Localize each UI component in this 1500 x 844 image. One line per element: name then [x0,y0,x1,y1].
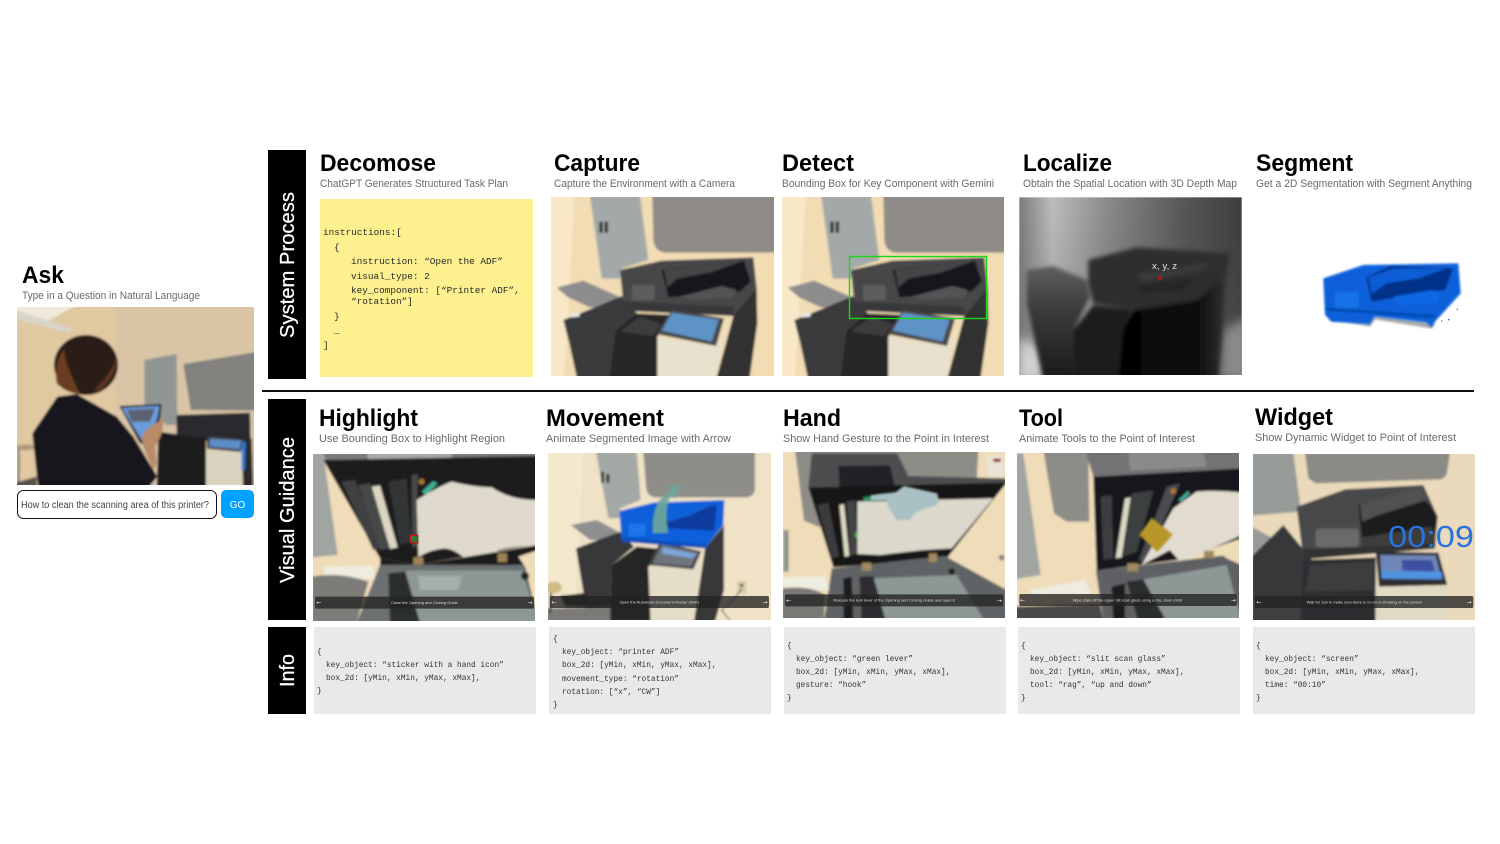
GO button: GO [230,500,245,511]
subtitle: decompose: ChatGPT Generates Structured Task Plan [320,178,508,190]
caption bar: → [1231,597,1236,604]
info card: highlight: key_object: “sticker with a hand icon” [326,662,504,670]
panel: detect [778,150,1011,380]
label bar: System Process [268,150,306,379]
panel: highlight [312,405,538,623]
timer widget: 00:09 [1388,519,1474,554]
caption bar: → [762,599,768,606]
caption bar: → [527,600,533,607]
subtitle: movement: Animate Segmented Image with Arrow [546,433,731,445]
red highlight box [410,535,418,543]
info card: hand: { [787,643,792,651]
caption bar: → [1466,599,1472,606]
heading: Localize: Localize [1023,150,1112,177]
yellow task plan note: … [334,326,340,337]
heading: Movement: Movement [546,405,664,432]
depth coordinates label: x, y, z [1152,261,1178,271]
caption bar: Close the Opening and Closing Guide [391,600,459,605]
caption bar [785,594,1003,606]
heading: Hand: Hand [783,405,841,432]
label bar: Info: Info [276,654,299,687]
yellow task plan note: instruction: “Open the ADF” [351,256,503,267]
panel: movement [546,405,773,622]
label bar: System Process: System Process [276,192,299,338]
info card: highlight: { [317,649,322,657]
panel: tool [1015,405,1242,622]
caption bar: Open the Automatic Document Feeder (ADF) [619,599,700,604]
info card: movement: box_2d: [yMin, xMin, yMax, xMax], [562,662,716,670]
photo: opened scanner with hand gesture [782,450,1008,622]
photo: opened scanner with rag tool [1015,450,1242,622]
info card: hand: gesture: “hook” [796,682,866,690]
label bar: Visual Guidance: Visual Guidance [276,437,299,583]
info card: widget: } [1256,695,1261,703]
caption bar: ← [786,597,791,604]
subtitle: segment: Get a 2D Segmentation with Segment Anything [1256,178,1472,190]
yellow task plan note: key_component: [“Printer ADF”, [351,285,520,296]
input box: How to clean the scanning area of this printer? [21,500,209,511]
hand gesture icon [871,486,939,520]
info card: widget: box_2d: [yMin, xMin, yMax, xMax], [1265,669,1419,677]
subtitle: ask: Type in a Question in Natural Language [22,290,200,302]
GO button [221,490,254,518]
yellow task plan note: “rotation”] [351,296,413,307]
subtitle: tool: Animate Tools to the Point of Interest [1019,433,1195,445]
info card: hand [784,627,1006,714]
heading: Capture: Capture [554,150,640,177]
info card: highlight: box_2d: [yMin, xMin, yMax, xMax], [326,675,480,683]
info card: hand: } [787,695,792,703]
caption bar [550,596,769,608]
panel: widget [1252,404,1478,623]
info card: movement: rotation: [“x”, “CW”] [562,689,660,697]
yellow task plan note: { [334,242,340,253]
caption bar [1019,594,1237,606]
curved teal arrow [652,485,682,533]
info card: tool: tool: “rag”, “up and down” [1030,682,1152,690]
caption bar: Release the lock lever of the Opening and Closing Guide and open it [833,598,955,603]
subtitle: hand: Show Hand Gesture to the Point in Interest [783,433,989,445]
label bar: Visual Guidance [268,399,306,620]
photo: printer with timer widget [1252,453,1478,623]
info card: tool: } [1021,695,1026,703]
photo: person with tablet at printer [13,303,258,490]
caption bar [1255,596,1473,608]
caption bar [315,597,534,609]
info card: widget: time: “00:10” [1265,682,1326,690]
info card: hand: key_object: “green lever” [796,656,913,664]
label bar: Info [268,627,306,714]
panel: ask [13,262,258,518]
subtitle: detect: Bounding Box for Key Component with Gemini [782,178,994,190]
info card: movement: key_object: “printer ADF” [562,649,679,657]
caption bar: ← [1256,599,1262,606]
yellow task plan note: instructions:[ [323,227,402,238]
photo: printer [547,193,780,380]
heading: Ask: Ask [22,262,65,289]
info card: movement: movement_type: “rotation” [562,676,679,684]
yellow task plan note: visual_type: 2 [351,271,430,282]
photo: opened scanner with red highlight [312,453,538,623]
info card: widget: { [1256,643,1261,651]
yellow task plan note [320,199,533,377]
panel: hand [782,405,1008,622]
heading: Widget: Widget [1255,404,1333,431]
info card: tool [1018,627,1240,714]
depth map [1017,197,1250,380]
segmented blue feeder [1323,263,1461,329]
info card: tool: key_object: “slit scan glass” [1030,656,1166,664]
info card: hand: box_2d: [yMin, xMin, yMax, xMax], [796,669,950,677]
info card: tool: box_2d: [yMin, xMin, yMax, xMax], [1030,669,1184,677]
photo: printer with animated blue feeder [546,452,773,622]
info card: tool: { [1021,643,1026,651]
info card: movement [549,627,771,714]
heading: Segment: Segment [1256,150,1353,177]
heading: Decomose: Decomose [320,150,436,177]
yellow task plan note: ] [323,340,329,351]
heading: Tool: Tool [1019,405,1063,432]
info card: widget: key_object: “screen” [1265,656,1359,664]
green bounding box [850,256,986,318]
info card: highlight: } [317,688,322,696]
info card: highlight [314,627,536,714]
caption bar: ← [316,600,322,607]
subtitle: capture: Capture the Environment with a Camera [554,178,736,190]
heading: Detect: Detect [782,150,854,177]
info card: movement: { [553,636,558,644]
caption bar: → [997,597,1002,604]
panel: localize [1017,150,1250,380]
input box [18,490,216,518]
caption bar: ← [1020,597,1025,604]
divider [262,390,1474,392]
panel: decompose [320,150,533,377]
panel: capture [547,150,780,380]
info card: movement: } [553,702,558,710]
heading: Highlight: Highlight [319,405,418,432]
photo: printer with bounding box [778,193,1011,380]
red depth point [1158,276,1162,280]
yellow task plan note: } [334,311,340,322]
caption bar: ← [551,599,557,606]
subtitle: highlight: Use Bounding Box to Highlight Region [319,433,505,445]
subtitle: widget: Show Dynamic Widget to Point of Interest [1255,432,1456,444]
subtitle: localize: Obtain the Spatial Location with 3D Depth Map [1023,178,1237,190]
panel: segment [1256,150,1472,329]
info card: widget [1253,627,1475,714]
caption bar: Wipe stain off the upper slit scan glass using a dry, clean cloth [1073,597,1182,602]
caption bar: Wait for 10s to make sure there is no error showing on the screen [1307,599,1422,604]
yellow rag tool [1139,518,1173,552]
